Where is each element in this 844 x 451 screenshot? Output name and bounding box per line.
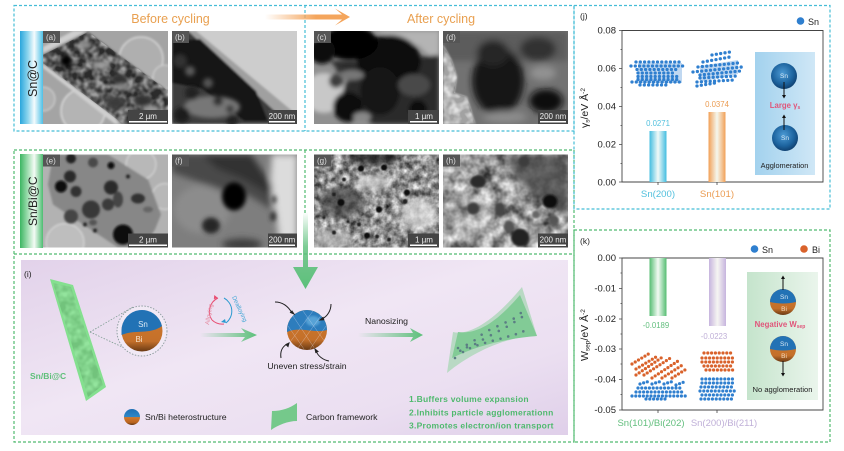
inset: agglomeration: Agglomeration: [761, 161, 808, 170]
atoms: Sn(200)/Bi(211): [700, 353, 735, 399]
bar: Sn(101): Sn(101): [700, 189, 734, 200]
image: (f) TEM: (f): [175, 156, 183, 166]
panel label (i): (i): [24, 269, 32, 279]
arrow: before to after: [265, 8, 350, 26]
strip: Sn@C label: [20, 31, 43, 124]
heading: after cycling: After cycling: [407, 12, 475, 26]
cycle: alloying and dealloying: Alloying: [205, 304, 215, 325]
axes: [578, 26, 823, 188]
strip: Sn/Bi@C label: [20, 154, 43, 248]
axes: γ: [579, 123, 591, 128]
cycle: alloying and dealloying: Dealloying: [230, 295, 247, 323]
axes: -0.04: [594, 374, 616, 386]
bar: Sn(200): 0.0271: [646, 119, 670, 128]
axes: 0.00: [598, 253, 616, 264]
legend: Sn and Bi: Sn: [762, 245, 773, 255]
bar: Sn(101)/Bi(202): [617, 258, 685, 429]
strip: Sn@C label: Sn@C: [26, 60, 40, 97]
image: (a) TEM: (a): [46, 33, 56, 42]
image: (c) TEM: 1 µm: [415, 112, 433, 121]
arrow: nanosizing: [358, 328, 423, 342]
bar: Sn(200)/Bi(211): -0.0223: [701, 332, 727, 341]
inset: no agglomeration: Sn: [780, 341, 788, 348]
label: Sn/Bi@C: Sn/Bi@C: [30, 371, 66, 381]
legend: Sn and Bi: [751, 245, 820, 255]
axes: -0.05: [594, 405, 616, 416]
Sn/Bi sphere: [117, 306, 167, 356]
panel: (j) surface energy chart: [574, 6, 830, 209]
image: (f) TEM: 200 nm: [269, 236, 296, 244]
inset: agglomeration: Large γ: [770, 101, 797, 110]
inset: no agglomeration: Sn: [780, 294, 788, 301]
stressed sphere: [287, 310, 327, 350]
axes: 0.00: [598, 178, 616, 188]
arrow: to stressed sphere: [200, 328, 257, 342]
axes: -0.02: [594, 314, 616, 325]
legend: Sn: Sn: [808, 17, 819, 27]
panel: (j) surface energy chart: (j): [580, 11, 588, 21]
inset: no agglomeration: [747, 272, 818, 400]
legend: carbon framework: Carbon framework: [306, 412, 378, 422]
image: (a) TEM: [43, 31, 168, 124]
inset: agglomeration: Sn: [781, 135, 789, 142]
bar: Sn(101)/Bi(202): -0.0189: [643, 321, 669, 330]
panel: Sn/Bi@C outer frame and TEM images: [14, 150, 574, 442]
axes: [578, 253, 823, 416]
axes: /eV Å: [578, 94, 591, 120]
axes: W: [579, 351, 591, 361]
strip: Sn/Bi@C label: Sn/Bi@C: [26, 176, 40, 226]
image: (g) TEM: (g): [317, 156, 327, 166]
axes: sep: [584, 340, 592, 351]
axes: 0.02: [598, 140, 616, 150]
axes: -0.03: [594, 344, 616, 355]
label: uneven stress/strain: Uneven stress/strain: [267, 361, 347, 371]
image: (b) TEM: 200 nm: [269, 112, 296, 121]
panel: (i) mechanism schematic: [21, 260, 568, 435]
axes: /eV Å: [578, 315, 591, 341]
axes: 0.06: [598, 64, 616, 74]
image: (d) TEM: 200 nm: [540, 112, 567, 121]
legend: heterostructure: Sn/Bi heterostructure: [145, 412, 227, 422]
legend: Sn: [797, 17, 819, 27]
axes: 0.08: [598, 26, 616, 36]
inset: no agglomeration: Bi: [781, 306, 787, 313]
bar: Sn(101): 0.0374: [705, 100, 730, 109]
atoms: Sn(200): [631, 62, 685, 85]
image: (d) TEM: [443, 31, 568, 124]
nanosized carbon sheet with particles: [447, 287, 537, 373]
Sn/Bi sphere: Bi: [135, 335, 143, 344]
inset: no agglomeration: Negative W: [755, 320, 797, 329]
zoom lines: [90, 307, 133, 352]
atoms: Sn(101)/Bi(202): [632, 353, 688, 399]
inset: no agglomeration: sep: [797, 324, 805, 330]
image: (a) TEM: 2 µm: [139, 112, 157, 121]
axes: -0.01: [594, 284, 616, 294]
inset: agglomeration: Sn: [780, 73, 788, 80]
image: (c) TEM: [314, 31, 439, 124]
arrow: down to schematic: [293, 212, 318, 289]
image: (h) TEM: [443, 154, 568, 248]
image: (e) TEM: 2 µm: [139, 236, 157, 244]
image: (e) TEM: [43, 154, 168, 248]
axes: -2: [580, 88, 587, 94]
bar: Sn(101)/Bi(202): Sn(101)/Bi(202): [617, 418, 685, 429]
benefits list: 1.Buffers volume expansion: [409, 394, 529, 404]
axes: 0.04: [598, 102, 616, 112]
label: nanosizing: Nanosizing: [365, 316, 408, 326]
inset: no agglomeration: Bi: [781, 353, 787, 360]
inset: agglomeration: [755, 52, 815, 175]
legend: heterostructure: [124, 409, 227, 425]
panel: (k) separation work chart: (k): [580, 236, 590, 246]
panel: Sn@C before and after cycling: [14, 5, 574, 133]
image: (f) TEM: [172, 154, 297, 250]
atoms: Sn(101): [693, 52, 742, 86]
benefits list: [409, 394, 554, 430]
image: (b) TEM: (b): [175, 33, 185, 42]
image: (g) TEM: [312, 150, 439, 248]
Sn/Bi sphere: Sn: [138, 320, 148, 329]
image: (d) TEM: (d): [446, 33, 456, 42]
image: (h) TEM: (h): [446, 156, 456, 166]
cycle: alloying and dealloying: [205, 295, 247, 325]
benefits list: 2.Inhibits particle agglomerationn: [409, 408, 554, 418]
image: (g) TEM: 1 µm: [415, 236, 433, 244]
panel: (k) separation work chart: [574, 230, 830, 442]
legend: carbon framework: [271, 403, 378, 430]
axes: s: [584, 119, 592, 123]
inset: no agglomeration: No agglomeration: [753, 385, 812, 394]
bar: Sn(200)/Bi(211): [691, 258, 757, 429]
heading: before cycling: Before cycling: [131, 12, 210, 26]
bar: Sn(200): Sn(200): [641, 189, 675, 200]
carbon sheet with embedded particles: [48, 278, 108, 402]
image: (h) TEM: 200 nm: [540, 236, 567, 244]
inset: agglomeration: s: [797, 105, 800, 111]
image: (e) TEM: (e): [46, 156, 56, 166]
axes: -2: [580, 309, 587, 315]
image: (c) TEM: (c): [317, 33, 327, 42]
image: (b) TEM: [172, 31, 297, 126]
bar: Sn(101): [700, 100, 734, 200]
legend: Sn and Bi: Bi: [812, 245, 820, 255]
bar: Sn(200): [641, 119, 675, 200]
bar: Sn(200)/Bi(211): Sn(200)/Bi(211): [691, 418, 757, 429]
stress arrows: [275, 302, 331, 361]
benefits list: 3.Promotes electron/ion transport: [409, 420, 554, 430]
